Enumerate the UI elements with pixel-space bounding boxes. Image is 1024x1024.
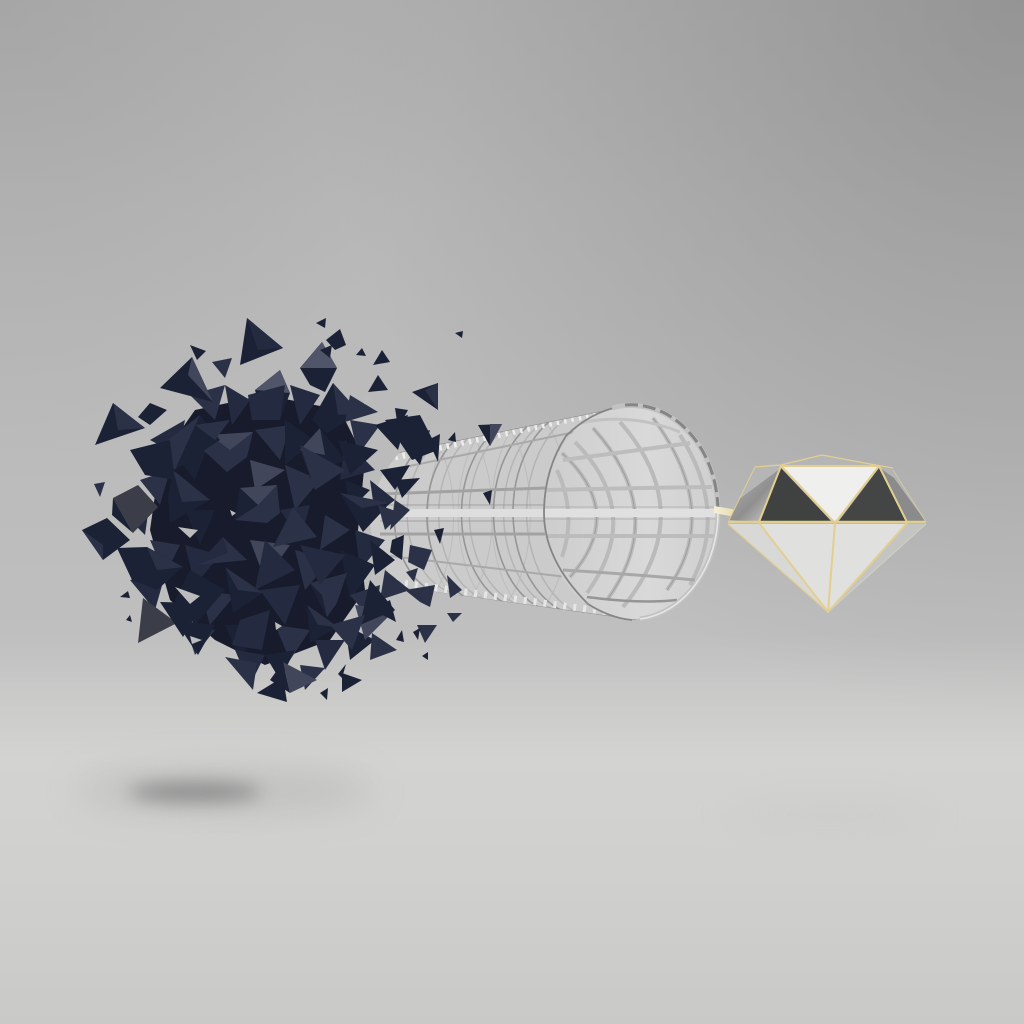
dark crown facet left: [759, 468, 832, 522]
gold edges: [728, 455, 926, 612]
small outer fragments: [94, 318, 502, 700]
opening grid: [540, 418, 720, 607]
floor shadow: [75, 768, 940, 831]
filling fragments: [120, 385, 430, 690]
right glass facet: [880, 468, 926, 522]
white crown facet: [781, 466, 879, 523]
diamond: [728, 455, 926, 612]
pavilion facets: [728, 524, 926, 612]
dark crown facet right: [838, 468, 906, 522]
left glass facet: [729, 468, 781, 522]
cylinder opening: [544, 405, 718, 619]
glass cylinder: [370, 404, 720, 620]
large fragments: [82, 318, 438, 702]
gaps between fragments: [148, 395, 372, 644]
cylinder rings and ribs: [380, 404, 636, 620]
diamond back crown: [728, 455, 926, 522]
light beam: [714, 506, 762, 522]
rim: [612, 405, 718, 619]
cylinder body: [370, 404, 636, 620]
fragment cluster: [82, 318, 502, 702]
inner arc edge: [544, 406, 632, 620]
cluster core mass: [150, 395, 365, 665]
